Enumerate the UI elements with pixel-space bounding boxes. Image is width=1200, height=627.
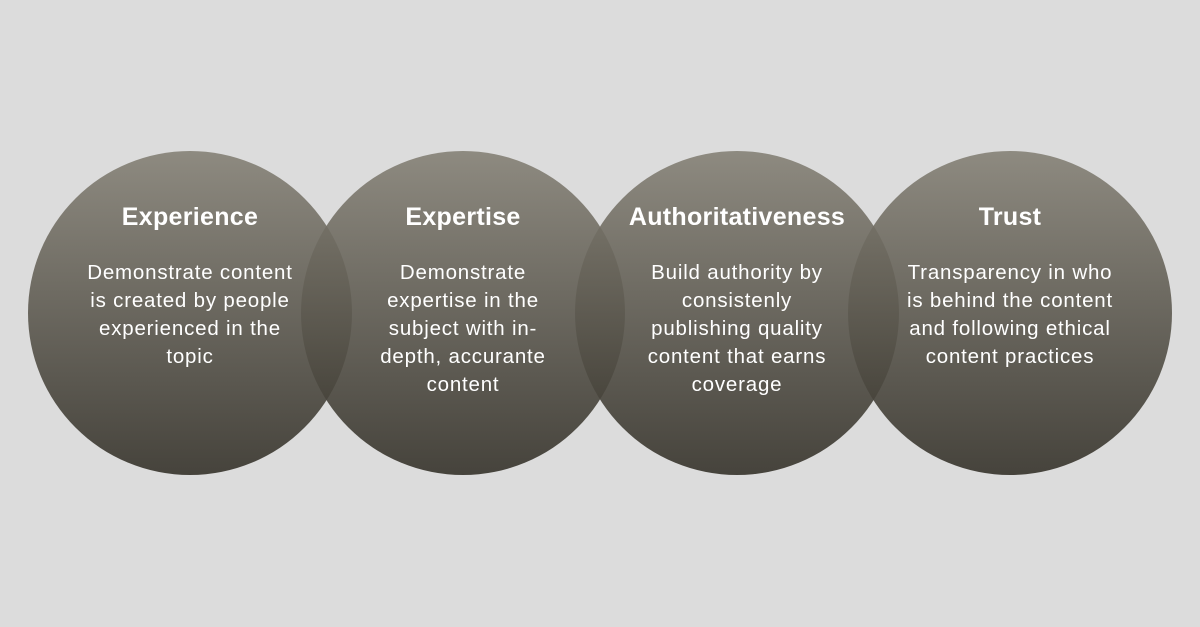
circle: expertise <box>301 151 625 475</box>
heading: Experience: Experience <box>122 203 258 231</box>
circle: experience <box>28 151 352 475</box>
text: trust description: Transparency in who <box>908 261 1112 284</box>
text: trust description: is behind the content <box>907 289 1113 312</box>
text: trust description: content practices <box>926 345 1094 368</box>
heading: Trust: Trust <box>979 203 1042 231</box>
text: authoritativeness description <box>648 261 826 396</box>
circle: trust <box>848 151 1172 475</box>
text: authoritativeness description: content that earns <box>648 345 826 368</box>
text: experience description: experienced in the <box>99 317 281 340</box>
text: expertise description: expertise in the <box>387 289 539 312</box>
text: expertise description: Demonstrate <box>400 261 526 284</box>
text: expertise description: subject with in- <box>389 317 537 340</box>
text: expertise description: content <box>427 373 499 396</box>
text: authoritativeness description: Build authority by <box>651 261 823 284</box>
text: experience description: topic <box>166 345 214 368</box>
text: authoritativeness description: publishing quality <box>651 317 823 340</box>
heading: Authoritativeness: Authoritativeness <box>629 203 845 231</box>
heading: Expertise: Expertise <box>405 203 521 231</box>
text: experience description: Demonstrate content <box>87 261 293 284</box>
text: expertise description: depth, accurante <box>380 345 546 368</box>
text: authoritativeness description: coverage <box>692 373 782 396</box>
text: trust description: and following ethical <box>909 317 1111 340</box>
text: experience description: is created by people <box>90 289 290 312</box>
text: expertise description <box>380 261 546 396</box>
text: trust description <box>907 261 1113 368</box>
text: experience description <box>87 261 293 368</box>
text: authoritativeness description: consistenly <box>682 289 792 312</box>
circle: authoritativeness <box>575 151 899 475</box>
